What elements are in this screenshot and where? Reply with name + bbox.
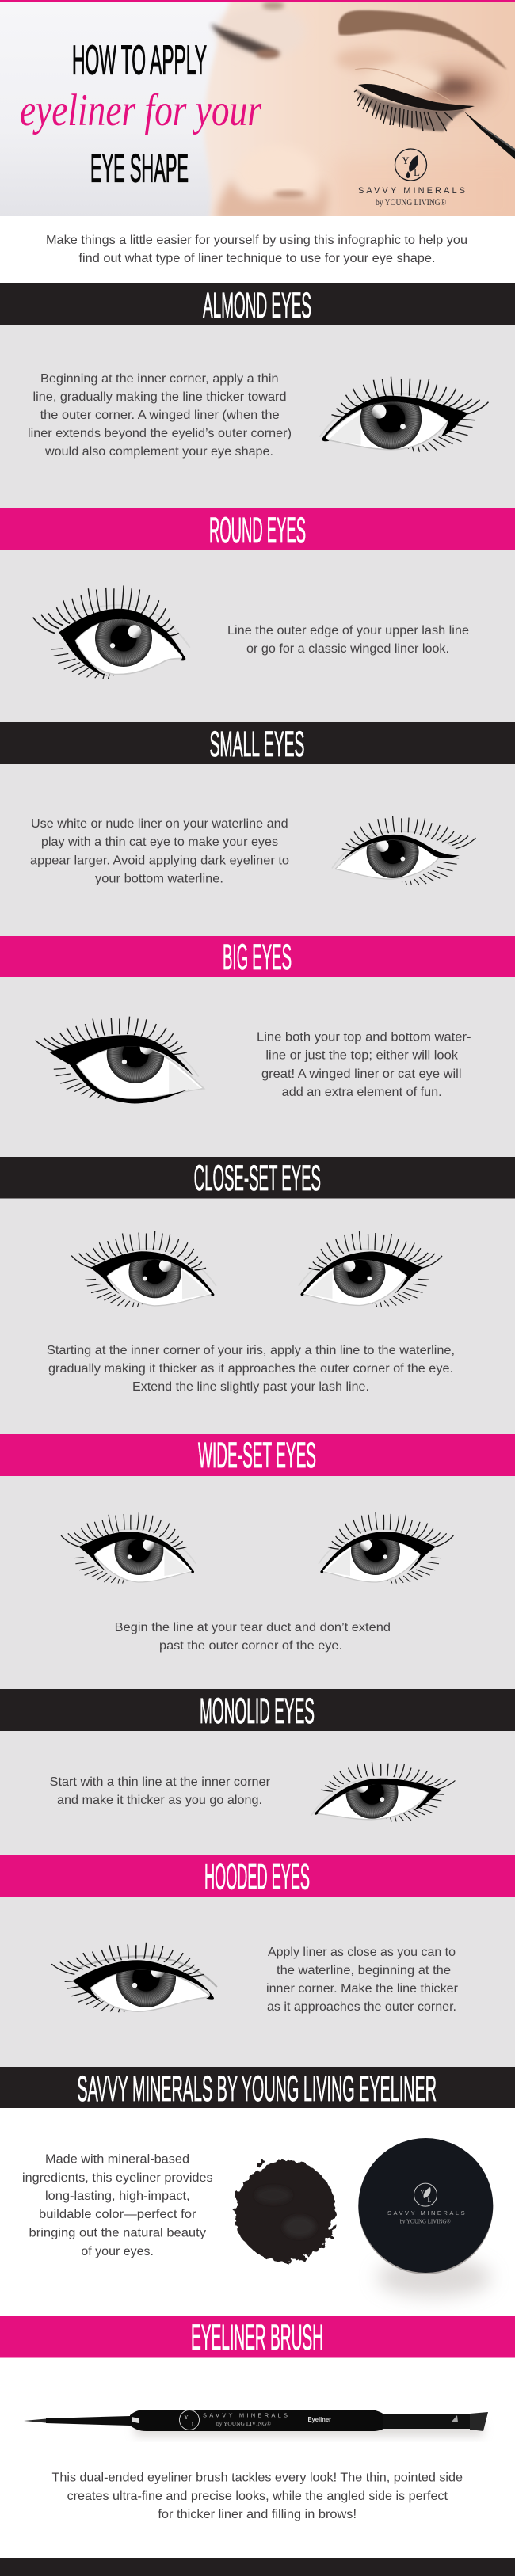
text: big tip: add an extra element of fun. (282, 1086, 442, 1099)
bottom dark bar (0, 2558, 515, 2576)
image: eyeliner jar (358, 2138, 493, 2296)
heading: monolid eyes: MONOLID EYES (200, 1691, 315, 1731)
text: monolid tip: and make it thicker as you go along. (57, 1794, 262, 1807)
text: product description: Made with mineral-based (45, 2153, 189, 2167)
panel: savvy minerals eyeliner (0, 2067, 515, 2296)
text: big tip: line or just the top; either will look (265, 1049, 459, 1063)
title: EYE SHAPE (90, 146, 189, 190)
text: hooded tip: inner corner. Make the line thicker (266, 1982, 459, 1996)
text: product description: ingredients, this eyeliner provides (22, 2171, 213, 2185)
heading: big eyes: BIG EYES (223, 937, 292, 977)
image: dual-ended brush: by YOUNG LIVING® (216, 2420, 271, 2427)
lashes and liner (355, 89, 467, 131)
image: dual-ended brush (24, 2410, 488, 2436)
text: round tip: Line the outer edge of your upper lash line (227, 624, 469, 637)
icon: hooded eye (52, 1943, 217, 2012)
image: eyeliner jar: SAVVY MINERALS (387, 2209, 465, 2216)
text: small tip: appear larger. Avoid applying dark eyeliner to (30, 854, 289, 868)
heading: wide-set eyes: WIDE-SET EYES (198, 1435, 316, 1475)
text: almond tip (28, 372, 292, 459)
icon: wide-set left eye (61, 1512, 196, 1584)
heading: small eyes: SMALL EYES (209, 724, 304, 764)
icon: small eye (332, 816, 475, 885)
panel: almond eyes (0, 283, 515, 508)
icon: monolid eye (311, 1762, 455, 1821)
panel: wide-set eyes (0, 1434, 515, 1689)
icon: almond eye (320, 377, 488, 452)
image: eyeliner jar: by YOUNG LIVING® (400, 2217, 451, 2225)
text: brush description (52, 2471, 463, 2521)
text: almond tip: the outer corner. A winged liner (when the (40, 409, 280, 422)
intro text: find out what type of liner technique to use for your eye shape. (79, 252, 436, 265)
text: hooded tip: as it approaches the outer corner. (267, 2000, 456, 2014)
heading: wide-set eyes (0, 1434, 515, 1476)
text: big tip: Line both your top and bottom water- (257, 1031, 471, 1044)
heading: small eyes (0, 722, 515, 764)
heading: eyeliner brush (0, 2316, 515, 2358)
icon: round eye (33, 585, 190, 679)
text: hooded tip: Apply liner as close as you can to (268, 1946, 456, 1959)
text: almond tip: would also complement your eye shape. (44, 445, 273, 459)
image: dual-ended brush: Eyeliner (307, 2416, 331, 2423)
heading: big eyes (0, 936, 515, 977)
image: dual-ended brush: L (192, 2422, 195, 2428)
icon: wide-set right eye (319, 1512, 453, 1584)
eyebrow (338, 10, 507, 70)
text: product description: buildable color—perfect for (39, 2208, 196, 2221)
image: loose eyeliner powder (235, 2160, 336, 2262)
text: close-set tip (47, 1344, 455, 1394)
brand logo: Savvy Minerals by Young Living: Y (402, 154, 410, 166)
title (20, 38, 261, 190)
brand logo: Savvy Minerals by Young Living: L (414, 166, 420, 178)
text: wide-set tip: past the outer corner of the eye. (159, 1639, 342, 1653)
brand logo: Savvy Minerals by Young Living (358, 149, 465, 207)
text: round tip: or go for a classic winged liner look. (246, 642, 449, 656)
text: monolid tip (50, 1775, 271, 1807)
heading: eyeliner brush: EYELINER BRUSH (191, 2317, 323, 2357)
heading: hooded eyes: HOODED EYES (204, 1856, 310, 1897)
eyeliner brush (464, 111, 515, 159)
heading: hooded eyes (0, 1855, 515, 1897)
text: small tip: play with a thin cat eye to make your eyes (41, 835, 278, 849)
title: HOW TO APPLY (72, 38, 207, 84)
text: hooded tip: the waterline, beginning at the (277, 1964, 451, 1977)
text: product description (22, 2153, 213, 2258)
title: eyeliner for your (20, 86, 261, 135)
heading: almond eyes (0, 283, 515, 325)
text: close-set tip: gradually making it thicker as it approaches the outer corner of the eye. (48, 1362, 453, 1376)
text: small tip (30, 817, 289, 885)
heading: round eyes (0, 508, 515, 550)
text: monolid tip: Start with a thin line at the inner corner (50, 1775, 271, 1789)
heading: close-set eyes (0, 1157, 515, 1199)
text: close-set tip: Starting at the inner corner of your iris, apply a thin line to the waterline, (47, 1344, 455, 1357)
image: dual-ended brush: Y (184, 2414, 189, 2421)
text: brush description: for thicker liner and filling in brows! (158, 2508, 357, 2521)
panel: close-set eyes (0, 1157, 515, 1434)
panel: monolid eyes (0, 1689, 515, 1855)
heading: round eyes: ROUND EYES (209, 510, 306, 550)
intro text: Make things a little easier for yourself by using this infographic to help you (46, 234, 467, 247)
top pink stripe (0, 0, 515, 3)
intro text (46, 234, 467, 265)
heading: almond eyes: ALMOND EYES (203, 285, 311, 325)
text: hooded tip (266, 1946, 459, 2014)
panel: eyeliner brush (0, 2316, 515, 2521)
text: close-set tip: Extend the line slightly past your lash line. (132, 1380, 369, 1394)
icon: close-set right eye (299, 1231, 442, 1307)
brand logo: Savvy Minerals by Young Living: by YOUNG LIVING® (376, 198, 446, 207)
text: wide-set tip (115, 1621, 391, 1653)
text: brush description: creates ultra-fine and precise looks, while the angled side is perfect (67, 2490, 448, 2503)
icon: close-set left eye (71, 1231, 216, 1307)
text: brush description: This dual-ended eyeliner brush tackles every look! The thin, pointed side (52, 2471, 463, 2485)
text: small tip: your bottom waterline. (95, 873, 223, 885)
text: wide-set tip: Begin the line at your tear duct and don’t extend (115, 1621, 391, 1634)
brand logo: Savvy Minerals by Young Living: SAVVY MINERALS (358, 186, 465, 196)
image: eyeliner jar: L (428, 2197, 432, 2204)
text: almond tip: liner extends beyond the eyelid’s outer corner) (28, 427, 292, 440)
text: round tip (227, 624, 469, 656)
text: almond tip: line, gradually making the line thicker toward (33, 390, 287, 404)
image: dual-ended brush: SAVVY MINERALS (203, 2412, 288, 2419)
text: product description: of your eyes. (81, 2245, 154, 2258)
text: product description: bringing out the natural beauty (29, 2227, 206, 2239)
text: almond tip: Beginning at the inner corner, apply a thin (40, 372, 278, 386)
panel: small eyes (0, 722, 515, 936)
text: product description: long-lasting, high-impact, (45, 2190, 190, 2203)
heading: close-set eyes: CLOSE-SET EYES (194, 1158, 321, 1198)
panel: big eyes (0, 936, 515, 1157)
hero photo: eye close-up with title (0, 0, 515, 230)
icon: big eye (36, 1017, 204, 1103)
text: small tip: Use white or nude liner on your waterline and (31, 817, 288, 831)
text: big tip: great! A winged liner or cat eye will (261, 1067, 461, 1081)
panel: round eyes (0, 508, 515, 722)
heading: monolid eyes (0, 1689, 515, 1731)
image: eyeliner jar: Y (420, 2189, 425, 2196)
text: big tip (257, 1031, 471, 1099)
panel: hooded eyes (0, 1855, 515, 2067)
